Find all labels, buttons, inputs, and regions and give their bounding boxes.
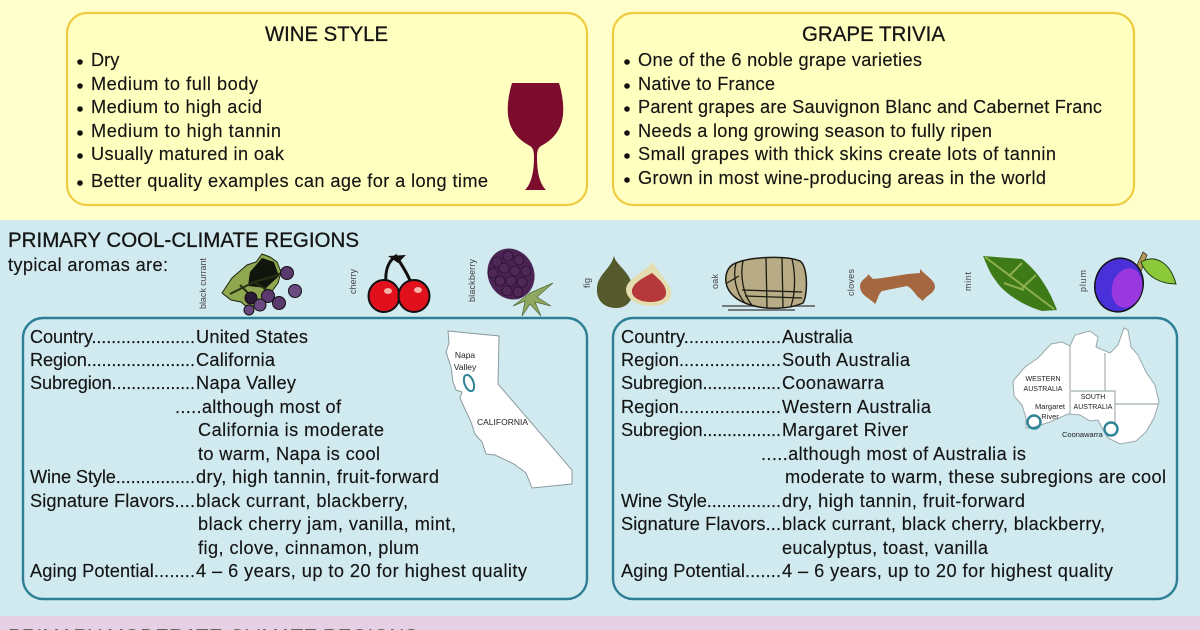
panel: grape trivia [613,13,1134,205]
text: United States details [30,327,528,581]
list: wine style traits: Medium to full body [91,74,259,94]
list: grape trivia facts: Small grapes with thick skins create lots of tannin [638,144,1056,164]
icon: cloves: cloves [846,268,856,296]
text: United States details: California is moderate [198,420,384,440]
map: California: Valley [454,362,477,372]
text: United States details: California [196,350,276,370]
text: Australia details: Country................... [621,327,781,347]
text: Australia details [621,327,1166,581]
icon: black currant [198,254,302,315]
text: United States details: to warm, Napa is cool [198,444,380,464]
text: Australia details: dry, high tannin, fruit-forward [782,491,1025,511]
heading: wine style: WINE STYLE [265,23,388,46]
list: wine style traits: Usually matured in oak [91,144,285,164]
icon: fig: fig [582,278,592,288]
text: United States details: 4 – 6 years, up to 20 for highest quality [196,561,528,581]
icon: cherry [348,255,430,312]
heading: grape trivia: GRAPE TRIVIA [802,23,945,46]
text: United States details: black currant, blackberry, [196,491,408,511]
text: Australia details: Coonawarra [782,373,885,393]
map: California [446,331,572,488]
list: grape trivia facts: One of the 6 noble grape varieties [638,50,922,70]
map: Australia: AUSTRALIA [1024,386,1063,393]
map: Australia: Coonawarra [1062,430,1104,439]
icon: wine glass [508,83,563,190]
icon: oak barrel: oak [710,274,720,289]
list: wine style traits [77,50,488,191]
text: Australia details: 4 – 6 years, up to 20 for highest quality [782,561,1114,581]
map: Australia: SOUTH [1081,394,1105,401]
panel: Australia [613,318,1177,599]
icon: plum: plum [1078,270,1088,292]
text: United States details: Country..................... [30,327,195,347]
list: wine style traits: Medium to high acid [91,97,262,117]
map: Australia: Margaret [1035,402,1066,411]
text: Australia details: black currant, black cherry, blackberry, [782,514,1105,534]
map: Australia: WESTERN [1026,376,1060,383]
text: Australia details: Australia [782,327,854,347]
text: typical aromas: typical aromas are: [8,255,168,275]
text: Australia details: Region.................... [621,397,781,417]
list: grape trivia facts: Needs a long growing season to fully ripen [638,121,992,141]
map: Australia: River [1041,412,1059,421]
icon: blackberry: blackberry [467,258,477,302]
text: Australia details: moderate to warm, these subregions are cool [785,467,1166,487]
text: Australia details: eucalyptus, toast, vanilla [782,538,989,558]
text: United States details: Wine Style................ [30,467,195,487]
panel: wine style [67,13,587,205]
icon: cloves [846,268,935,304]
list: grape trivia facts [624,50,1102,188]
map: Australia: AUSTRALIA [1074,404,1113,411]
text: Australia details: Subregion................ [621,420,781,440]
icon: fig [582,256,671,308]
text: Australia details: Margaret River [782,420,908,440]
icon: mint leaf: mint [963,272,973,291]
icon: mint leaf [963,256,1057,311]
text: United States details: .....although most of [175,397,342,417]
list: wine style traits: Better quality examples can age for a long time [91,171,488,191]
icon: blackberry [467,241,553,316]
list: grape trivia facts: Native to France [638,74,775,94]
text: United States details: Napa Valley [196,373,297,393]
icon: cherry: cherry [348,268,358,294]
icon: oak barrel [710,257,815,310]
text: Australia details: Wine Style............... [621,491,781,511]
text: United States details: United States [196,327,308,347]
text: United States details: fig, clove, cinnamon, plum [198,538,419,558]
icon: black currant: black currant [198,258,208,309]
map: Australia [1013,328,1159,444]
heading: primary cool-climate regions: PRIMARY COOL-CLIMATE REGIONS [8,229,359,252]
list: grape trivia facts: Grown in most wine-producing areas in the world [638,168,1046,188]
text: Australia details: Region.................... [621,350,781,370]
text: United States details: Subregion................. [30,373,195,393]
list: grape trivia facts: Parent grapes are Sauvignon Blanc and Cabernet Franc [638,97,1102,117]
text: Australia details: .....although most of Australia is [761,444,1026,464]
text: United States details: Signature Flavors.... [30,491,195,511]
list: wine style traits: Dry [91,50,120,70]
text: United States details: black cherry jam, vanilla, mint, [198,514,456,534]
text: United States details: dry, high tannin, fruit-forward [196,467,439,487]
text: United States details: Region...................... [30,350,195,370]
text: Australia details: South Australia [782,350,911,370]
list: wine style traits: Medium to high tannin [91,121,281,141]
text: Australia details: Signature Flavors... [621,514,781,534]
text: Australia details: Subregion................ [621,373,781,393]
map: California: Napa [455,350,475,360]
panel: United States [23,318,587,599]
text: United States details: Aging Potential........ [30,561,195,581]
text: Australia details: Aging Potential....... [621,561,781,581]
text: Australia details: Western Australia [782,397,932,417]
icon: plum [1078,252,1176,317]
map: California: CALIFORNIA [477,417,528,427]
